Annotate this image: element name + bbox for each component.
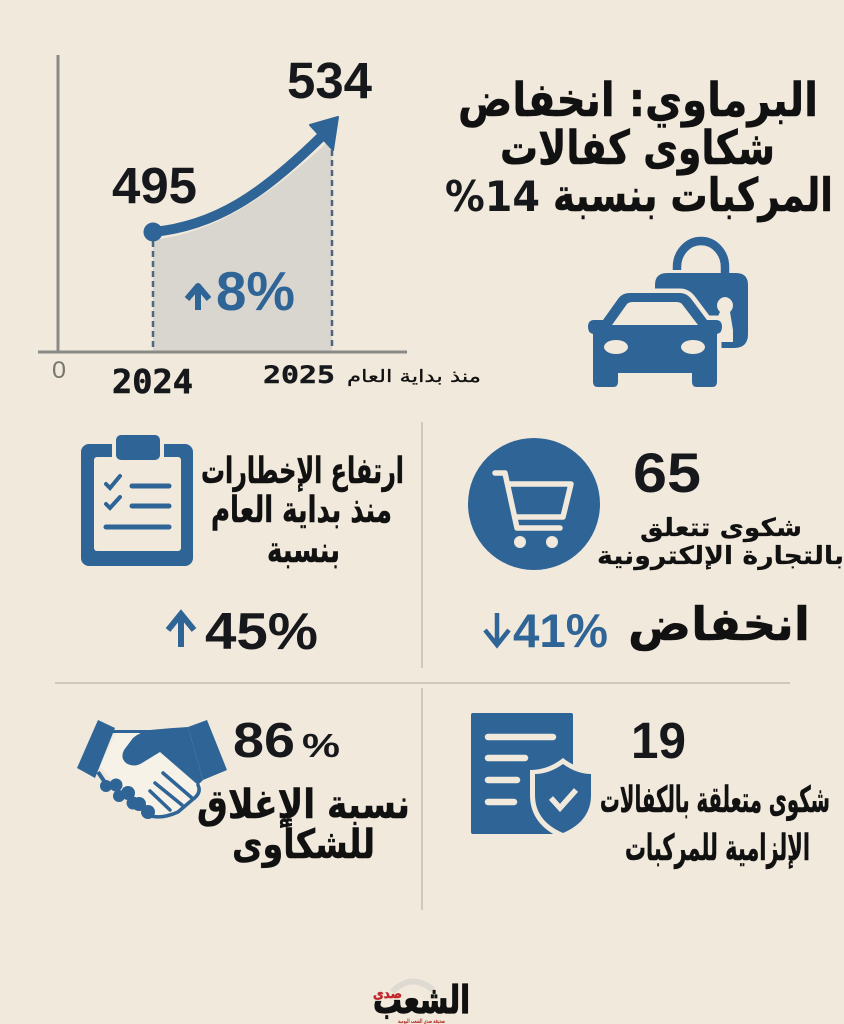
- up arrow icon: [168, 614, 194, 647]
- value 495: 495: [112, 157, 197, 214]
- line chart: complaints 2024 to 2025: [38, 52, 481, 401]
- padlock shackle: [677, 241, 725, 276]
- value 41%: 41%: [513, 604, 608, 657]
- title: شكاوى كفالات: [500, 121, 775, 176]
- label 2025: 2025: [263, 361, 335, 389]
- value 86%: 86: [233, 714, 295, 768]
- title: [445, 73, 833, 222]
- chart axes: [38, 55, 407, 352]
- value 534: 534: [287, 52, 373, 109]
- text: closure rate of complaints: نسبة الإغلاق: [197, 782, 410, 828]
- shaded area under curve: [153, 138, 332, 352]
- text: e-commerce complaints: بالتجارة الإلكترونية: [597, 541, 844, 571]
- text: rise in notifications: منذ بداية العام: [211, 490, 392, 531]
- icon: shopping cart: [468, 438, 600, 570]
- title: %14: [445, 172, 540, 221]
- car halo: [588, 293, 722, 387]
- car body: [588, 293, 722, 387]
- text: rise in notifications: ارتفاع الإخطارات: [201, 451, 404, 492]
- panel: mandatory warranty complaints: [471, 712, 830, 869]
- dashed drop lines: [153, 150, 332, 350]
- value 65: 65: [633, 441, 701, 504]
- axis zero: 0: [52, 357, 66, 384]
- value 86%: %: [302, 727, 340, 764]
- text: e-commerce complaints: [597, 513, 844, 571]
- icon: document with shield: [471, 713, 596, 839]
- text: decrease: انخفاض: [628, 597, 810, 651]
- rising arrow: [144, 117, 338, 242]
- value 86%: [233, 714, 340, 768]
- dividers: [55, 422, 790, 910]
- up arrow icon: [187, 286, 209, 310]
- logo text: الشعب: [373, 978, 470, 1022]
- change 8%: 8%: [216, 260, 295, 322]
- logo red word: صدى: [373, 987, 402, 1002]
- text: rise in notifications: [201, 451, 404, 571]
- text: e-commerce complaints: شكوى تتعلق: [640, 513, 802, 543]
- icon: car with padlock: [588, 241, 748, 387]
- logo: Sada Al-Shaab: [373, 978, 470, 1024]
- keyhole: [716, 297, 733, 342]
- label 2024: 2024: [112, 362, 193, 401]
- icon: handshake: [77, 720, 227, 819]
- value 45%: 45%: [205, 603, 318, 661]
- text: rise in notifications: بنسبة: [267, 530, 340, 571]
- windshield: [612, 302, 698, 325]
- text: mandatory warranty complaints: [600, 780, 830, 869]
- panel: notifications: [81, 431, 404, 661]
- panel: closure rate: [77, 714, 410, 868]
- headlights: [604, 340, 705, 354]
- panel: e-commerce complaints: [468, 438, 844, 657]
- text: closure rate of complaints: للشكأوى: [232, 818, 375, 868]
- icon: clipboard: [81, 431, 193, 566]
- value 19: 19: [631, 712, 686, 769]
- text: closure rate of complaints: [197, 782, 410, 868]
- down arrow icon: [485, 613, 509, 645]
- padlock body: [655, 273, 748, 348]
- label since beginning of year: منذ بداية العام: [347, 367, 481, 387]
